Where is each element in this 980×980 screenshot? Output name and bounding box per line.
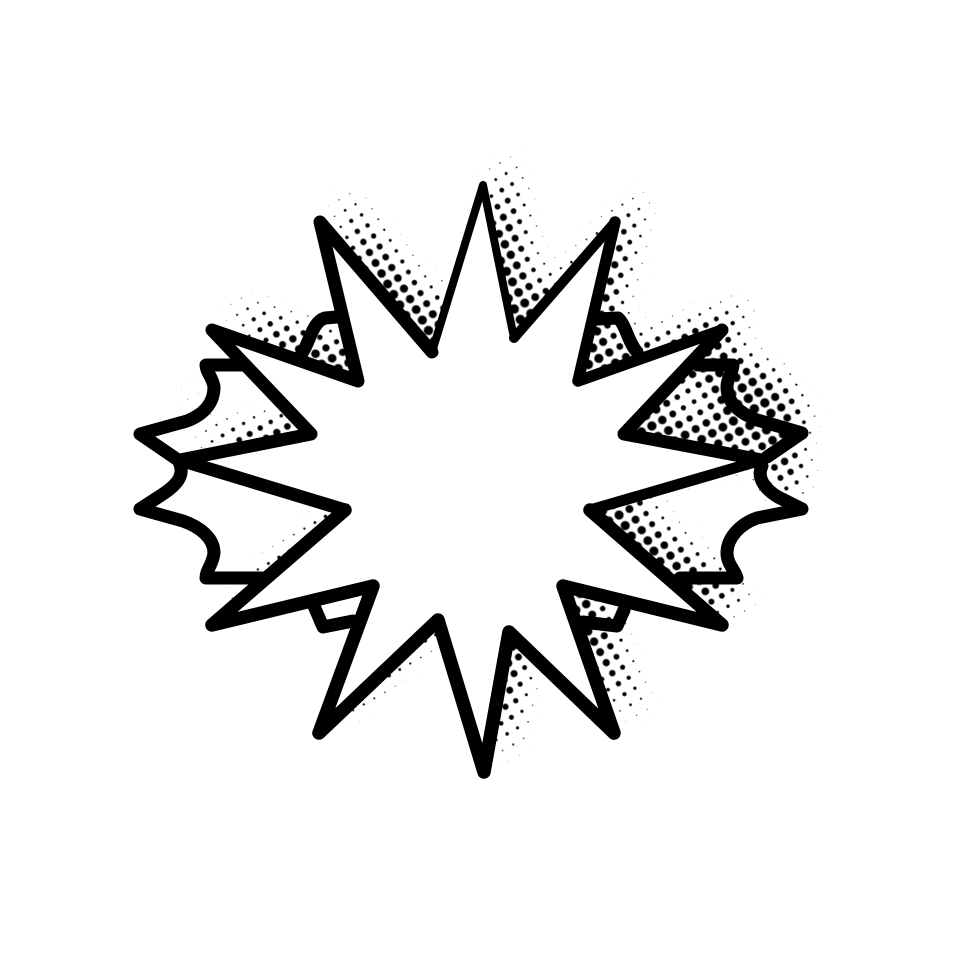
ribbon: small upper left (302, 317, 337, 353)
ribbon: upper left (140, 365, 243, 460)
ribbon: lower left (140, 460, 263, 578)
ribbon: small lower left (314, 606, 353, 627)
star body (180, 185, 762, 772)
ribbon: small lower right (583, 610, 624, 626)
star outline (180, 185, 762, 772)
ribbon: lower right (680, 466, 802, 578)
ribbon outlines behind the star (140, 317, 802, 627)
ribbon: upper right (698, 365, 802, 457)
ribbon: small upper right (598, 318, 637, 352)
